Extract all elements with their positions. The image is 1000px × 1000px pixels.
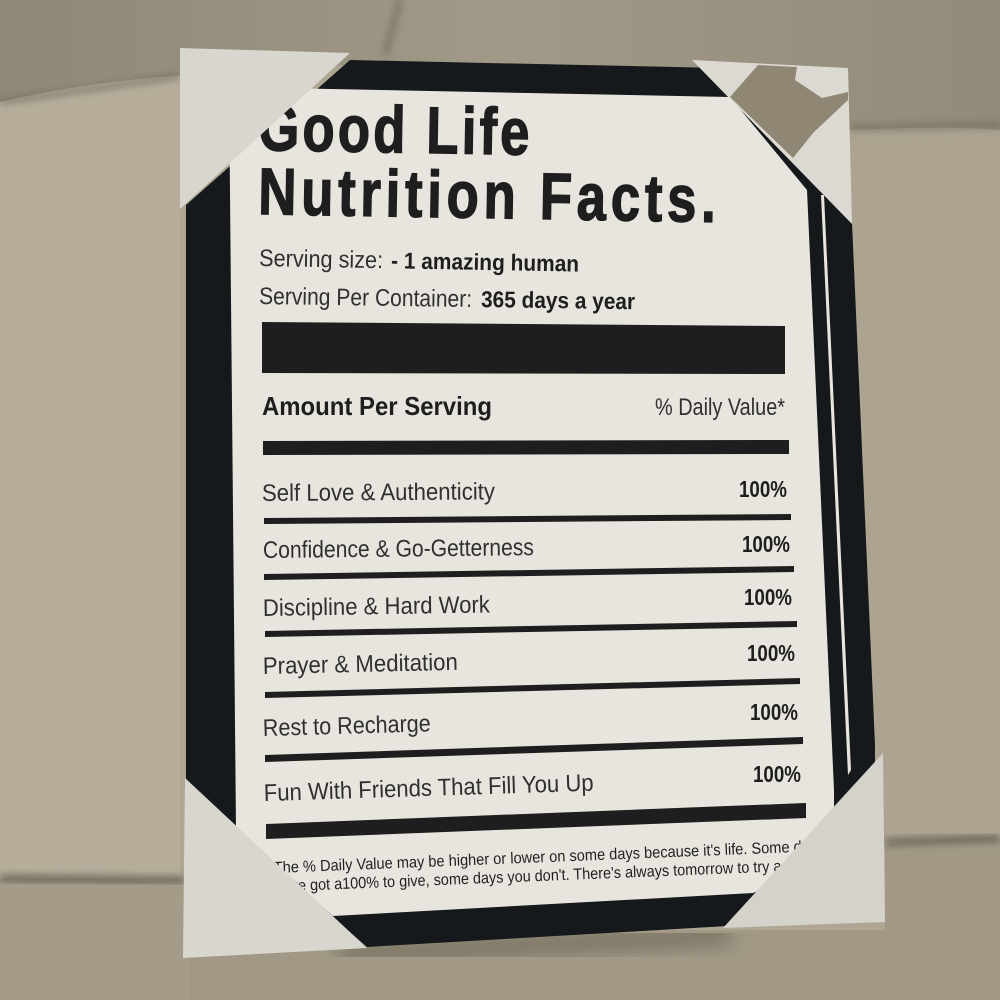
row: prayer — [263, 640, 800, 698]
amount per serving heading: Amount Per Serving — [262, 391, 492, 421]
row: rest — [262, 699, 803, 762]
corner protector: top right — [692, 60, 852, 224]
bottom thick bar — [266, 803, 806, 839]
corner protector: top left — [180, 48, 350, 209]
row: discipline: Discipline & Hard Work — [263, 591, 491, 622]
white side gap — [821, 195, 851, 775]
row: confidence: 100% — [742, 531, 790, 557]
row: fun — [263, 761, 801, 807]
servings per container: Serving Per Container: — [259, 283, 472, 313]
footnote: ve got a100% to give, some days you don't. There's always tomorrow to try a — [290, 858, 782, 895]
daily value heading: % Daily Value* — [655, 394, 785, 421]
row: rest: 100% — [750, 699, 798, 725]
serving size: Serving size: — [259, 245, 383, 274]
white poster panel — [229, 87, 834, 916]
corner protector: bottom right — [723, 753, 885, 928]
row: discipline — [263, 584, 797, 637]
row: prayer: 100% — [747, 640, 795, 666]
serving size — [259, 245, 579, 278]
row: self love: Self Love & Authenticity — [262, 478, 495, 507]
thick black bar — [262, 322, 785, 374]
row: fun: 100% — [753, 761, 801, 787]
row: self love — [262, 476, 791, 524]
row: prayer: Prayer & Meditation — [263, 649, 458, 680]
corner protector: bottom left — [183, 778, 367, 958]
row: confidence: Confidence & Go-Getterness — [263, 534, 534, 564]
torn cardboard patch — [730, 65, 848, 158]
row: confidence — [263, 531, 794, 580]
footnote: The % Daily Value may be higher or lower on some days because it's life. Some days — [273, 838, 825, 877]
row: self love: 100% — [739, 476, 787, 502]
row: rest: Rest to Recharge — [262, 710, 431, 742]
title: Nutrition Facts.: Nutrition Facts. — [258, 154, 721, 236]
row: fun: Fun With Friends That Fill You Up — [263, 770, 594, 807]
serving size: - 1 amazing human — [391, 247, 579, 277]
servings per container: 365 days a year — [481, 286, 635, 314]
medium bar — [263, 440, 789, 455]
servings per container — [259, 283, 635, 315]
black picture frame — [186, 60, 875, 947]
row: discipline: 100% — [744, 584, 792, 610]
footnote — [273, 838, 825, 895]
title: Good Life: Good Life — [258, 90, 534, 169]
